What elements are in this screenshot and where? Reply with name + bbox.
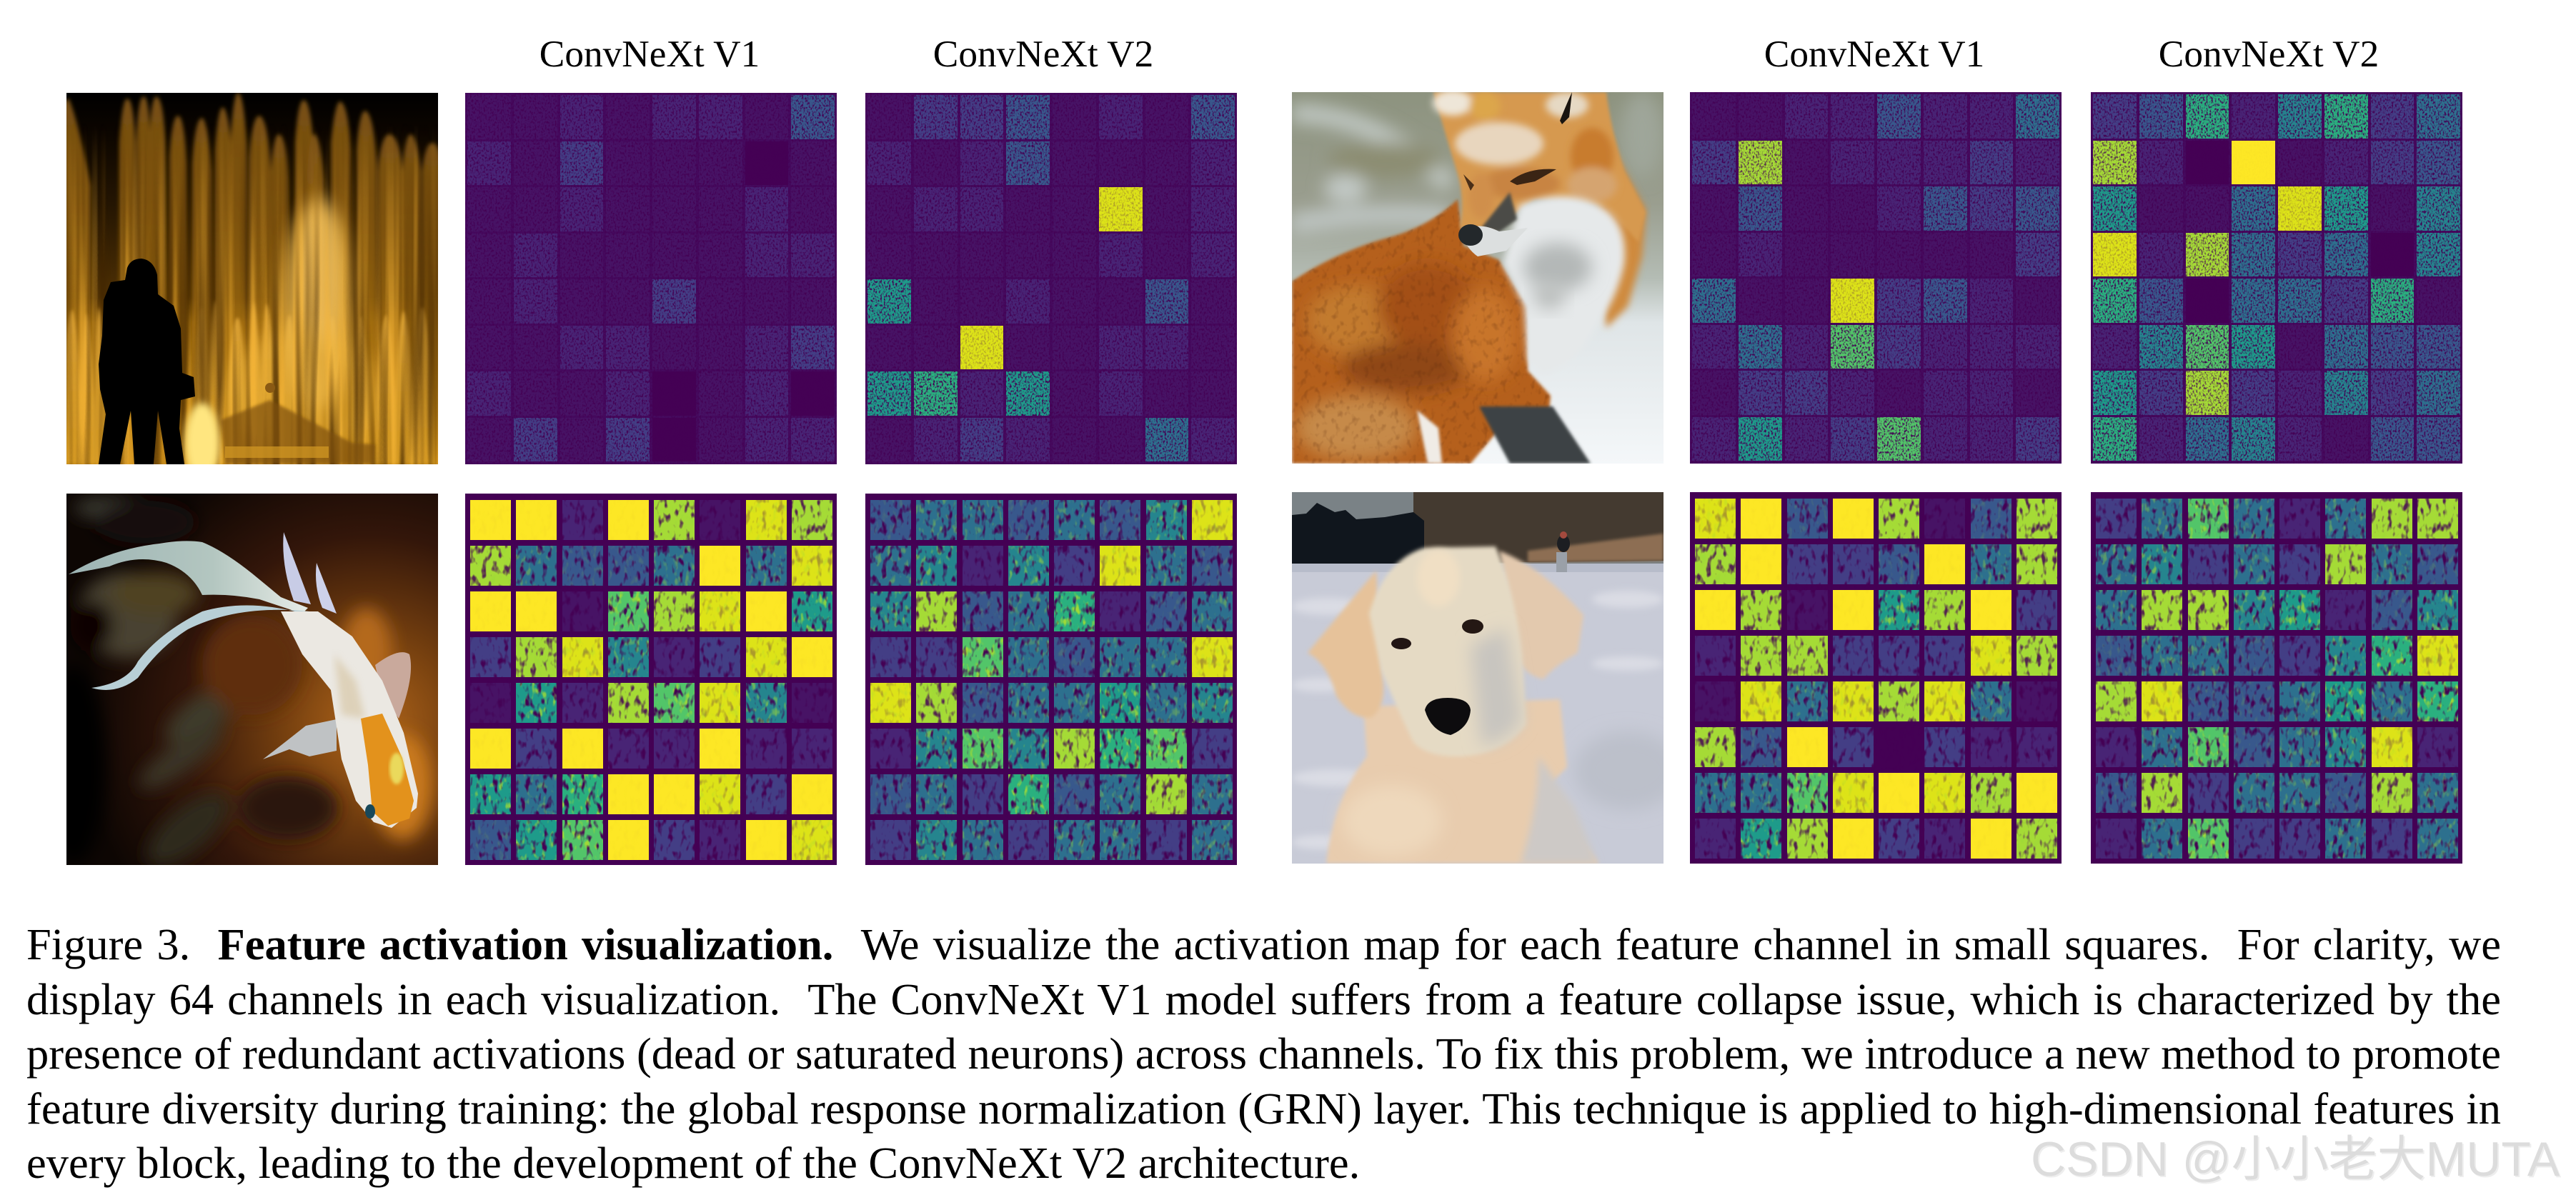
- head: [1433, 92, 1646, 242]
- body: [1292, 199, 1551, 464]
- skier in distance: [1556, 531, 1570, 572]
- fur texture: [1292, 199, 1551, 464]
- body: [281, 611, 418, 828]
- text: Figure 3. Feature activation visualization. We visualize the activation map for each feature channel in small squares. For clarity, we: [26, 919, 2501, 969]
- column heading: ConvNeXt V1 (right): ConvNeXt V1: [1764, 33, 1984, 75]
- chest and fur: [1326, 699, 1599, 864]
- chest: [1503, 196, 1625, 374]
- pavilion roof: [221, 400, 375, 464]
- photo: red fox: [1292, 92, 1664, 464]
- text: feature diversity during training: the global response normalization (GRN) layer. This technique is applied to high-dimensional features in: [26, 1083, 2501, 1133]
- heatmap: fish ConvNeXt V1: [465, 494, 837, 865]
- central bright jet: [281, 204, 355, 411]
- upper tail fin: [69, 541, 308, 614]
- heatmap: fox ConvNeXt V2: [2091, 92, 2462, 464]
- photo: fountain with silhouetted couple: [66, 93, 438, 464]
- heatmap: dog ConvNeXt V2: [2091, 492, 2462, 864]
- text: display 64 channels in each visualization. The ConvNeXt V1 model suffers from a feature collapse issue, which is characterized by the: [26, 974, 2501, 1024]
- heatmap: fountain ConvNeXt V1: [465, 93, 837, 464]
- caption text block: [26, 919, 2501, 1188]
- nose: [1425, 698, 1471, 735]
- orange neck edge: [1592, 135, 1646, 328]
- photo: white koi fish: [66, 494, 438, 865]
- right ear: [1499, 551, 1583, 679]
- heatmap: fountain ConvNeXt V2: [865, 93, 1237, 464]
- vertical water streaks: [66, 93, 438, 464]
- column heading: ConvNeXt V2 (left): ConvNeXt V2: [933, 33, 1153, 75]
- lower tail fin: [91, 605, 313, 690]
- column heading: ConvNeXt V1 (left): ConvNeXt V1: [539, 33, 760, 75]
- silhouette of couple: [99, 259, 195, 464]
- dark leg: [1479, 406, 1591, 464]
- heatmap: fish ConvNeXt V2: [865, 494, 1237, 865]
- heatmap: fox ConvNeXt V1: [1690, 92, 2062, 464]
- heatmap: dog ConvNeXt V1: [1690, 492, 2062, 864]
- photo: golden retriever on snow: [1292, 492, 1664, 864]
- text: every block, leading to the development of the ConvNeXt V2 architecture.: [26, 1138, 1360, 1188]
- column heading: ConvNeXt V2 (right): ConvNeXt V2: [2159, 33, 2379, 75]
- side fins: [375, 652, 411, 719]
- snout: [1481, 192, 1517, 232]
- watermark: CSDN @小小老大MUTA: [2031, 1132, 2560, 1186]
- left ear: [1308, 571, 1383, 718]
- eyes: [1391, 638, 1411, 649]
- orange head: [361, 714, 414, 826]
- text: presence of redundant activations (dead or saturated neurons) across channels. To fix this problem, we introduce a new method to promote: [26, 1029, 2501, 1079]
- head: [1369, 546, 1526, 756]
- dorsal spikes: [283, 532, 311, 604]
